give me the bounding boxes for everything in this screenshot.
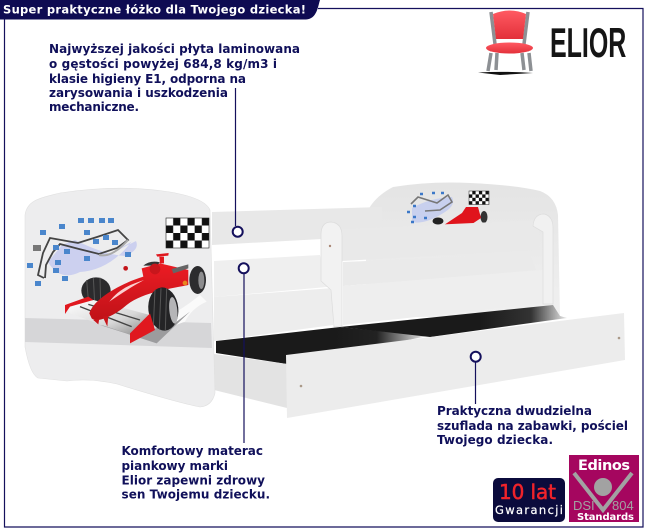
heading banner <box>0 0 320 20</box>
right mattress <box>343 254 536 286</box>
text: drawer <box>437 404 628 447</box>
callout: drawer <box>471 352 481 404</box>
badge: 10 years warranty <box>493 478 565 522</box>
heading banner: Super praktyczne łóżko dla Twojego dziecka! <box>3 2 306 16</box>
safety rail <box>342 220 540 261</box>
left rail post <box>321 222 342 327</box>
text: board quality: mechaniczne. <box>49 100 139 114</box>
left mattress <box>214 255 327 297</box>
right headboard artwork <box>407 191 489 225</box>
text: board quality: Najwyższej jakości płyta laminowana <box>49 42 300 56</box>
inner frame shadow right <box>340 305 567 337</box>
drawer front <box>286 313 625 418</box>
inner frame shadow left <box>216 327 428 364</box>
text: drawer: szuflada na zabawki, pościel <box>437 419 628 433</box>
badge: Edinos standards: Edinos <box>578 458 630 474</box>
drawer left side <box>214 354 287 408</box>
text: drawer: Twojego dziecka. <box>437 433 553 447</box>
bed <box>212 182 625 418</box>
back panel <box>212 207 382 245</box>
badge: Edinos standards: Standards <box>577 512 634 523</box>
race car <box>65 253 207 343</box>
badge: Edinos standards: 804 <box>612 498 634 513</box>
text: mattress: sen Twojemu dziecku. <box>122 488 270 502</box>
logo wordmark: ELIOR <box>550 21 626 67</box>
text: board quality: zarysowania i uszkodzenia <box>49 86 228 100</box>
badge: Edinos standards <box>569 455 639 523</box>
checkered flag <box>166 218 209 248</box>
text: mattress: Elior zapewni zdrowy <box>122 474 265 488</box>
left headboard <box>25 188 215 407</box>
right lower rail <box>343 270 543 325</box>
callout: board <box>233 88 243 237</box>
text: board quality: o gęstości powyżej 684,8 kg/m3 i <box>49 57 277 71</box>
badge: 10 years warranty: Gwarancji <box>495 503 563 517</box>
text: mattress: piankowy marki <box>122 459 228 473</box>
white highlight behind car <box>167 295 207 328</box>
right rail post <box>533 214 553 304</box>
badge: 10 years warranty: 10 lat <box>499 480 556 504</box>
callout: mattress <box>239 263 249 443</box>
text: mattress <box>122 444 270 502</box>
shadow <box>100 312 190 343</box>
circuit map <box>27 218 137 286</box>
logo: Elior chair <box>478 10 626 75</box>
text: mattress: Komfortowy materac <box>122 444 263 458</box>
right headboard <box>366 182 560 317</box>
text: board quality: klasie higieny E1, odporna na <box>49 72 246 86</box>
grey band <box>25 318 212 348</box>
text: drawer: Praktyczna dwudzielna <box>437 404 592 418</box>
badge: Edinos standards: DSI <box>573 498 595 513</box>
text: board quality <box>49 42 300 114</box>
left lower rail <box>214 288 333 341</box>
